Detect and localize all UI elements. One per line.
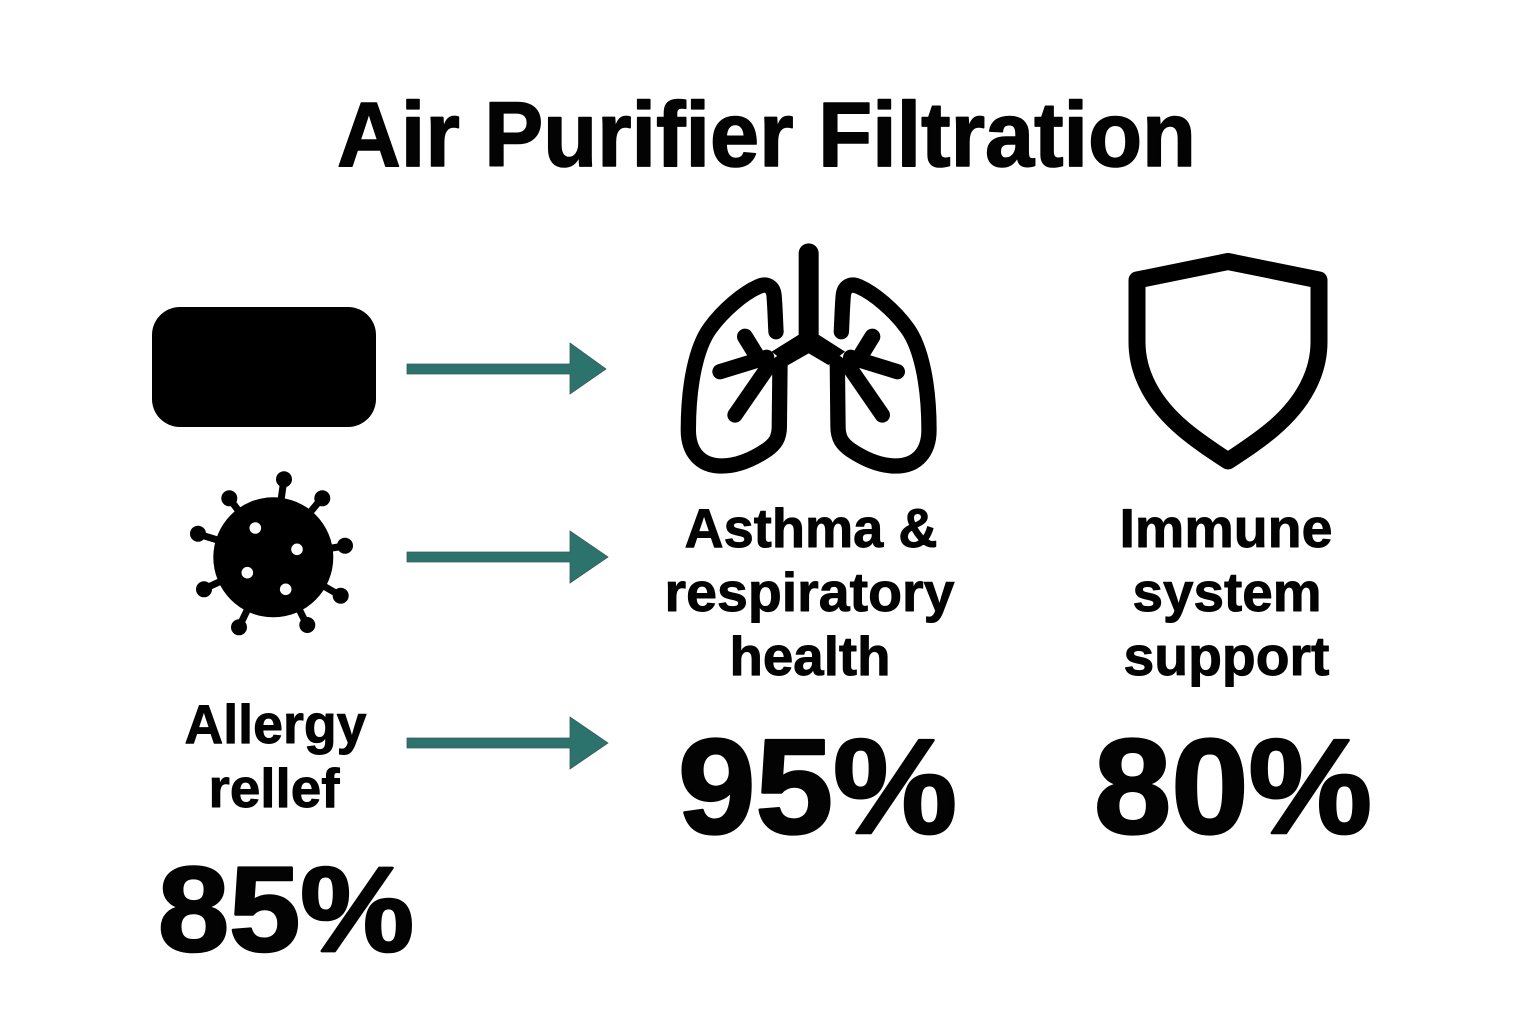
label: allergy relief: Allergy <box>184 693 367 755</box>
label: asthma and respiratory health: Asthma & <box>684 497 938 559</box>
label: asthma and respiratory health <box>664 497 955 687</box>
icon: shield <box>1137 262 1319 461</box>
arrow: top <box>407 343 606 394</box>
arrow: middle <box>407 531 608 583</box>
label: immune system support: support <box>1124 625 1330 687</box>
stat: 85%: 85% <box>158 841 414 977</box>
label: asthma and respiratory health: health <box>730 625 890 687</box>
icon: air filter block <box>152 307 376 427</box>
label: immune system support: Immune <box>1120 497 1332 559</box>
icon: virus <box>190 471 353 635</box>
label: asthma and respiratory health: respiratory <box>664 561 955 623</box>
arrow: bottom <box>407 717 608 769</box>
label: allergy relief: rellef <box>208 757 340 819</box>
stat: 95%: 95% <box>678 711 957 862</box>
title: Air Purifier Filtration <box>337 84 1196 186</box>
icon: lungs <box>688 253 929 466</box>
label: allergy relief <box>184 693 367 819</box>
stat: 80%: 80% <box>1094 711 1372 862</box>
label: immune system support <box>1120 497 1332 687</box>
label: immune system support: system <box>1132 561 1322 623</box>
